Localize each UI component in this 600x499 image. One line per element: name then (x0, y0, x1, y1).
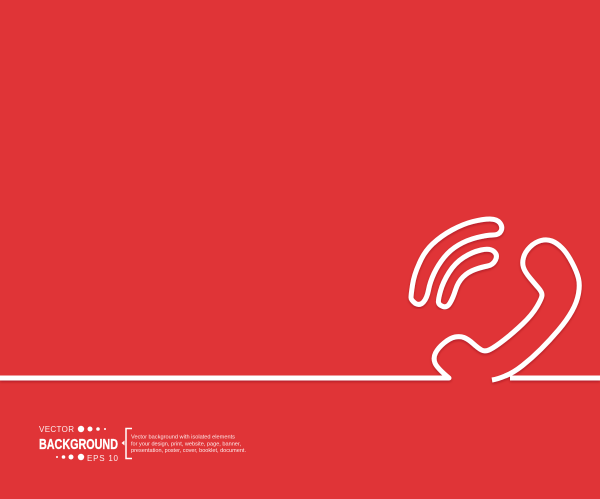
arrow pointer (122, 440, 124, 446)
bracket (126, 428, 132, 458)
label: eps 10: EPS 10 (87, 454, 119, 463)
label: background: BACKGROUND (39, 437, 118, 453)
description text (131, 434, 246, 454)
icon: inner signal wave (438, 249, 496, 307)
decorative dots top (78, 426, 106, 432)
decorative dots bottom (56, 454, 84, 460)
description text: presentation, poster, cover, booklet, document. (131, 448, 246, 454)
description text: for your design, print, website, page, banner, (131, 442, 241, 448)
description text: Vector background with isolated elements (131, 434, 235, 440)
label: vector: VECTOR (39, 425, 74, 434)
horizon line with telephone handset (0, 240, 600, 380)
icon: outer signal wave (411, 219, 502, 304)
